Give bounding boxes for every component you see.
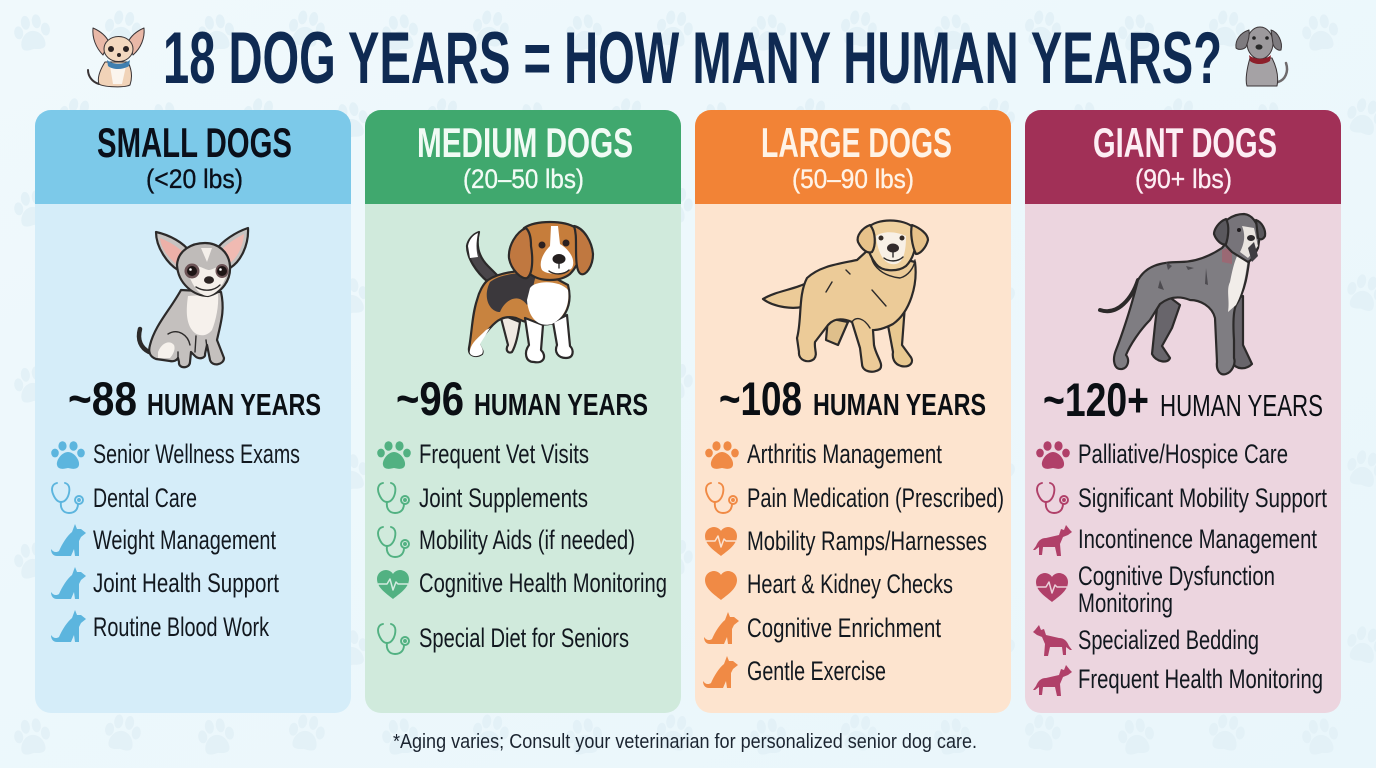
item: specialized bedding (1033, 625, 1259, 656)
item: mobility ramps: Mobility Ramps/Harnesses (747, 526, 987, 556)
item: cognitive dysfunction monitoring (1036, 561, 1275, 618)
item: frequent vet visits (377, 439, 589, 469)
item: pain medication: Pain Medication (Prescribed) (747, 483, 1004, 513)
item: heart and kidney checks (705, 569, 953, 600)
care list: giant dogs (1033, 439, 1327, 696)
header: medium dogs: (20–50 lbs) (463, 164, 584, 194)
big number: 108 human years: HUMAN YEARS (813, 387, 986, 422)
header: giant dogs: (90+ lbs) (1135, 164, 1232, 194)
big number: 120+ human years (1043, 373, 1323, 426)
care list: large dogs (703, 439, 1004, 688)
item: weight management: Weight Management (93, 525, 276, 555)
item: frequent health monitoring (1033, 664, 1323, 696)
big number: 96 human years (396, 372, 648, 425)
big number: 88 human years (68, 372, 321, 425)
illustration: labrador (763, 220, 928, 372)
panel: small dogs (35, 110, 351, 713)
item: special diet for seniors (378, 623, 629, 654)
item: pain medication (706, 483, 1004, 513)
header: small dogs: (<20 lbs) (146, 164, 243, 194)
big number: 108 human years: ~108 (719, 372, 802, 425)
item: joint health support (51, 567, 279, 599)
care list: small dogs (51, 439, 300, 642)
panel: large dogs (695, 110, 1011, 713)
item: weight management (51, 524, 276, 556)
header: medium dogs: MEDIUM DOGS (417, 119, 633, 166)
item: frequent vet visits: Frequent Vet Visits (419, 439, 589, 469)
item: mobility ramps (705, 526, 987, 556)
header: large dogs: (50–90 lbs) (792, 164, 914, 194)
item: palliative care: Palliative/Hospice Care (1078, 439, 1288, 469)
illustration: beagle (467, 222, 593, 362)
item: cognitive enrichment: Cognitive Enrichment (747, 613, 941, 643)
header: small dogs (35, 110, 351, 204)
big number: 120+ human years: ~120+ (1043, 373, 1149, 426)
panel: giant dogs (1025, 110, 1341, 713)
item: mobility aids (378, 525, 635, 557)
item: joint supplements: Joint Supplements (419, 483, 588, 513)
big number: 96 human years: HUMAN YEARS (474, 387, 648, 422)
item: routine blood work (51, 610, 269, 642)
header: giant dogs: GIANT DOGS (1093, 119, 1277, 166)
item: gentle exercise (703, 656, 886, 688)
big number: 108 human years (719, 372, 986, 425)
header: medium dogs (365, 110, 681, 204)
item: dental care: Dental Care (93, 483, 197, 513)
item: senior wellness exams (51, 439, 300, 469)
item: arthritis management (705, 439, 942, 469)
item: cognitive health monitoring: Cognitive Health Monitoring (419, 568, 667, 598)
care list: medium dogs (377, 439, 667, 654)
footnote: *Aging varies; Consult your veterinarian for personalized senior dog care. (393, 731, 977, 753)
illustration: great dane (1100, 214, 1265, 374)
header: large dogs (695, 110, 1011, 204)
icon: title great dane (1236, 27, 1287, 86)
item: cognitive health monitoring (377, 568, 667, 599)
item: joint health support: Joint Health Support (93, 568, 279, 598)
big number: 96 human years: ~96 (396, 372, 464, 425)
item: heart and kidney checks: Heart & Kidney Checks (747, 569, 953, 599)
item: joint supplements (378, 483, 588, 513)
item: dental care (52, 483, 197, 513)
item: special diet for seniors: Special Diet for Seniors (419, 623, 629, 653)
item: cognitive dysfunction monitoring: Monitoring (1078, 588, 1173, 618)
panel: medium dogs (365, 110, 681, 713)
item: cognitive enrichment (704, 612, 941, 644)
item: mobility aids: Mobility Aids (if needed) (419, 525, 635, 555)
big number: 88 human years: HUMAN YEARS (147, 387, 321, 422)
item: senior wellness exams: Senior Wellness Exams (93, 439, 300, 469)
item: palliative care (1036, 439, 1288, 469)
item: cognitive dysfunction monitoring: Cognitive Dysfunction (1078, 561, 1275, 591)
item: routine blood work: Routine Blood Work (93, 612, 269, 642)
header: large dogs: LARGE DOGS (761, 119, 952, 166)
header: giant dogs (1025, 110, 1341, 204)
big number: 88 human years: ~88 (68, 372, 137, 425)
item: incontinence management (1033, 524, 1317, 556)
header: small dogs: SMALL DOGS (97, 119, 292, 166)
item: gentle exercise: Gentle Exercise (747, 656, 886, 686)
item: specialized bedding: Specialized Bedding (1078, 625, 1259, 655)
icon: title chihuahua (88, 28, 144, 87)
illustration: chihuahua (139, 228, 248, 367)
item: arthritis management: Arthritis Management (747, 439, 942, 469)
